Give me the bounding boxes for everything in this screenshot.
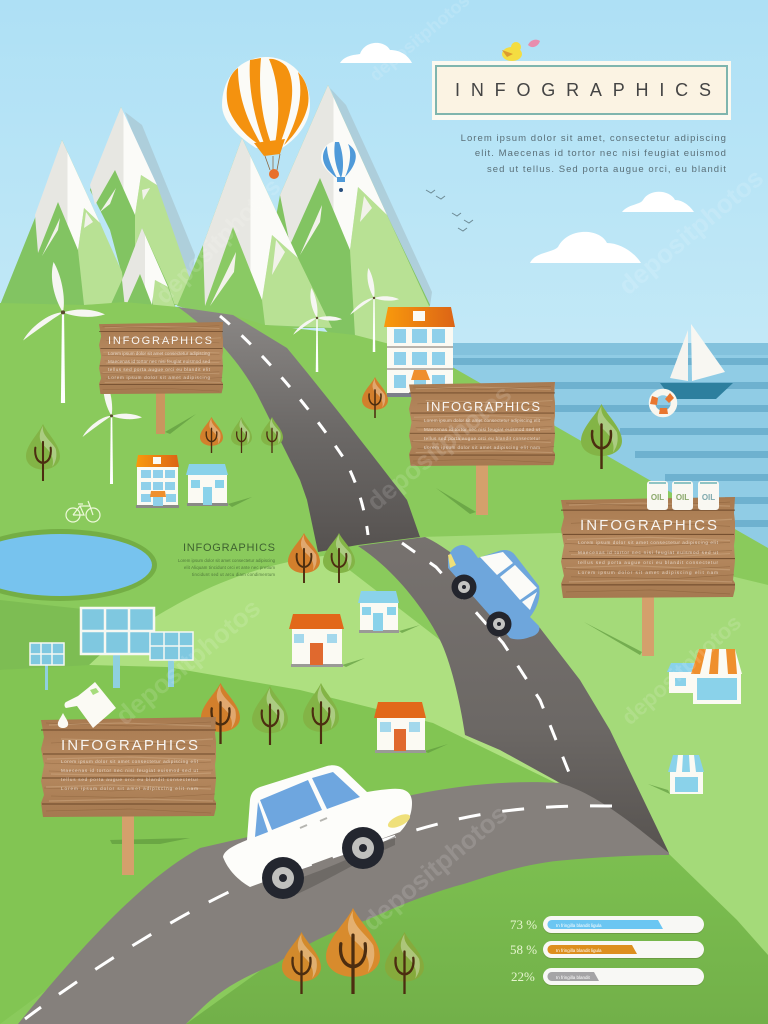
- building: hotel: [384, 307, 455, 397]
- windmill 2: [83, 378, 142, 484]
- signboard 3: Lorem ipsum dolor sit amet consectetur adipiscing elit: [578, 540, 719, 545]
- centre text block: elit Aliquam tincidunt orci et ante nec pretium: [184, 565, 275, 570]
- blue car: [448, 545, 540, 639]
- oil barrels: OIL: [702, 493, 715, 502]
- signboard 2: Lorem ipsum dolor sit amet adipiscing elit nam: [424, 445, 540, 450]
- cloud: centre: [530, 232, 641, 263]
- solar panel: left: [30, 643, 64, 690]
- hot air balloon: large: [222, 57, 310, 179]
- watermarks: depositphotos: [361, 378, 517, 517]
- signboard 3: Lorem ipsum dolor sit amet adipiscing elit nam: [578, 570, 718, 575]
- mountain shadows: [125, 88, 432, 320]
- bar: 22 percent: In fringilla blandit: [556, 975, 591, 980]
- icon: oil canister with drop: [58, 682, 116, 728]
- icon: pink bird: [528, 40, 540, 47]
- hill: lower right: [186, 853, 768, 1024]
- bar: 58 percent: In fringilla blandit ligula: [556, 948, 602, 953]
- signboard 3: [561, 497, 736, 656]
- centre text block: INFOGRAPHICS: [183, 542, 275, 554]
- icon: yellow duck: [502, 42, 522, 61]
- road: middle segment: [358, 537, 669, 853]
- signboard 3: Maecenas id tortor nec nisi feugiat euismod sed ut: [578, 550, 719, 555]
- mountain: back left: [90, 107, 192, 305]
- cloud: right: [622, 192, 694, 212]
- signboard 1: tellus sed porta augue orci eu blandit elit: [108, 367, 211, 372]
- house: orange roof middle: [289, 614, 365, 667]
- oil barrels: [647, 481, 719, 510]
- signboard 3: tellus sed porta augue orci eu blandit consectetur: [578, 560, 718, 565]
- signboard 4: [41, 717, 217, 875]
- watermarks: depositphotos: [613, 162, 768, 301]
- mountain: far left: [0, 140, 130, 310]
- signboard 2: tellus sed porta augue orci eu blandit consectetur: [424, 436, 540, 441]
- intro paragraph: sed ut tellus. Sed porta augue orci, eu blandit: [487, 164, 727, 175]
- signboard 2: [409, 382, 556, 515]
- hill: main green land: [0, 302, 768, 1024]
- hill: lower left: [0, 665, 560, 1024]
- signboard 4: Maecenas id tortor nec nisi feugiat euismod sed ut: [61, 768, 199, 773]
- solar panel: large: [81, 608, 154, 688]
- cloud: top centre: [340, 43, 412, 63]
- oil barrels: OIL: [676, 493, 689, 502]
- building: orange roof small: [136, 455, 179, 508]
- signboard 1: Maecenas id tortor nec nisi feugiat euismod sed: [108, 359, 210, 364]
- trees: bottom: [282, 908, 424, 994]
- intro paragraph: [461, 133, 727, 175]
- windmill 3: [293, 288, 342, 372]
- centre text block: tincidunt sed ut arcu diam condimentum: [192, 572, 275, 577]
- watermarks: depositphotos: [150, 173, 286, 309]
- white car: [223, 765, 412, 899]
- centre text block: [178, 542, 276, 577]
- bar: 22 percent: 22%: [511, 969, 535, 984]
- flock of birds: [426, 190, 473, 231]
- shop: lower right: [648, 755, 704, 794]
- sailboat: [660, 324, 733, 399]
- life ring: [650, 392, 674, 414]
- shadow: sign 1: [165, 414, 196, 434]
- icon: bicycle: [66, 501, 100, 522]
- intro paragraph: Lorem ipsum dolor sit amet, consectetur adipiscing: [461, 133, 727, 144]
- watermarks: depositphotos: [617, 610, 746, 730]
- signboard 2: Maecenas id tortor nec nisi feugiat euismod sed ut: [424, 427, 541, 432]
- bar: 58 percent: 58 %: [510, 942, 537, 957]
- sea: [420, 343, 768, 555]
- signboard 3: INFOGRAPHICS: [580, 517, 717, 534]
- tree: coast: [581, 404, 622, 469]
- signboard 4: tellus sed porta augue orci eu blandit consectetur: [61, 777, 198, 782]
- hill: middle right light: [420, 533, 768, 960]
- bar: 73 percent: [510, 916, 704, 934]
- signboard 1: Lorem ipsum dolor sit amet adipiscing: [108, 375, 210, 380]
- hill: left of road lower shade: [0, 600, 155, 670]
- trees: lower middle: [201, 683, 339, 745]
- hill: middle left light: [87, 555, 560, 785]
- intro paragraph: elit. Maecenas id tortor nec nisi feugiat euismod: [475, 148, 727, 159]
- shop: right large: [691, 649, 742, 704]
- watermarks: [110, 0, 768, 937]
- windmill 1: [23, 262, 105, 403]
- signboard 4: Lorem ipsum dolor sit amet consectetur adipiscing elit: [61, 759, 199, 764]
- house: orange roof lower: [374, 702, 448, 753]
- watermarks: depositphotos: [357, 798, 513, 937]
- signboard 1: [99, 322, 224, 434]
- title box: [432, 61, 731, 120]
- hot air balloon: small blue: [321, 141, 356, 192]
- oil barrels: OIL: [651, 493, 664, 502]
- road: lower segment: [18, 782, 669, 1024]
- signboard 1: INFOGRAPHICS: [108, 335, 212, 347]
- bar: 58 percent: [510, 941, 704, 959]
- trees: middle: [288, 533, 355, 583]
- mountain: small front peak: [106, 228, 178, 315]
- watermarks: depositphotos: [110, 592, 266, 731]
- bar: 22 percent: [511, 968, 704, 986]
- shop: right small: [667, 663, 695, 693]
- solar panel: right: [150, 632, 193, 687]
- signboard 4: INFOGRAPHICS: [61, 737, 198, 754]
- windmill 4: [350, 268, 399, 352]
- centre text block: Lorem ipsum dolor sit amet consectetur adipiscing: [178, 558, 276, 563]
- signboard 2: INFOGRAPHICS: [426, 399, 540, 414]
- road: upper segment: [178, 307, 420, 552]
- signboard 2: Lorem ipsum dolor sit amet consectetur adipiscing elit: [424, 418, 541, 423]
- lake: [0, 529, 157, 601]
- signboard 1: Lorem ipsum dolor sit amet consectetur adipiscing: [108, 351, 210, 356]
- mountain: right tall: [268, 85, 430, 347]
- shadow: sign 4: [110, 838, 190, 844]
- bar: 73 percent: In fringilla blandit ligula: [556, 923, 602, 928]
- title box: INFOGRAPHICS: [455, 80, 711, 100]
- mountain: centre: [177, 138, 332, 328]
- house: blue roof: [358, 591, 420, 633]
- trees: upper left: [26, 377, 388, 481]
- road markings: [25, 316, 612, 1019]
- bar: 73 percent: 73 %: [510, 917, 537, 932]
- sky background: [0, 0, 768, 560]
- progress bars: [510, 916, 704, 986]
- signboard 4: Lorem ipsum dolor sit amet adipiscing elit nam: [61, 786, 198, 791]
- building: blue roof small: [186, 464, 252, 507]
